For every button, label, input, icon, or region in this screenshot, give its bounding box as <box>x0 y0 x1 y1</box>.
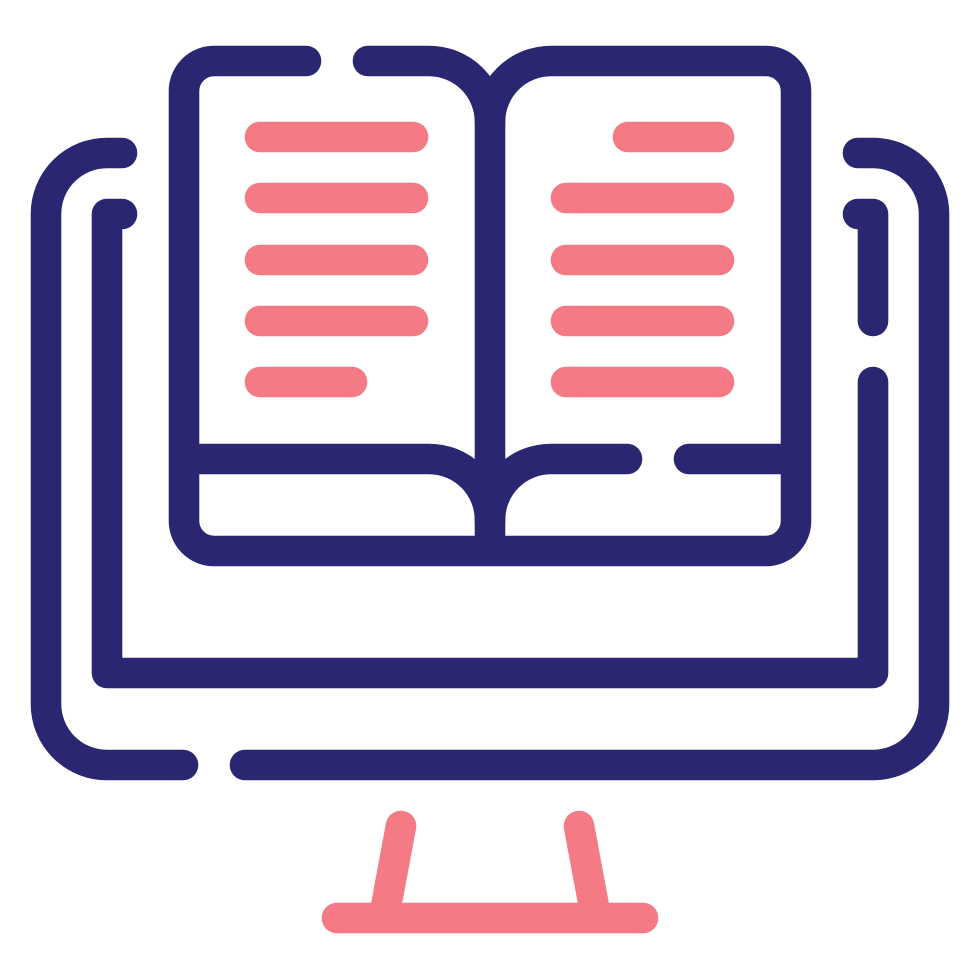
book top left page edge and spine <box>368 61 490 540</box>
right page bottom edge <box>689 444 790 474</box>
monitor outer frame <box>46 153 934 765</box>
monitor stand <box>337 826 643 918</box>
book cover left top edge and outline <box>184 61 796 551</box>
right page bottom curve <box>490 459 627 520</box>
left page bottom curve <box>190 459 490 520</box>
open book <box>184 61 796 551</box>
left page text lines <box>260 137 413 382</box>
right page text lines <box>566 137 719 382</box>
monitor screen frame <box>107 214 873 673</box>
